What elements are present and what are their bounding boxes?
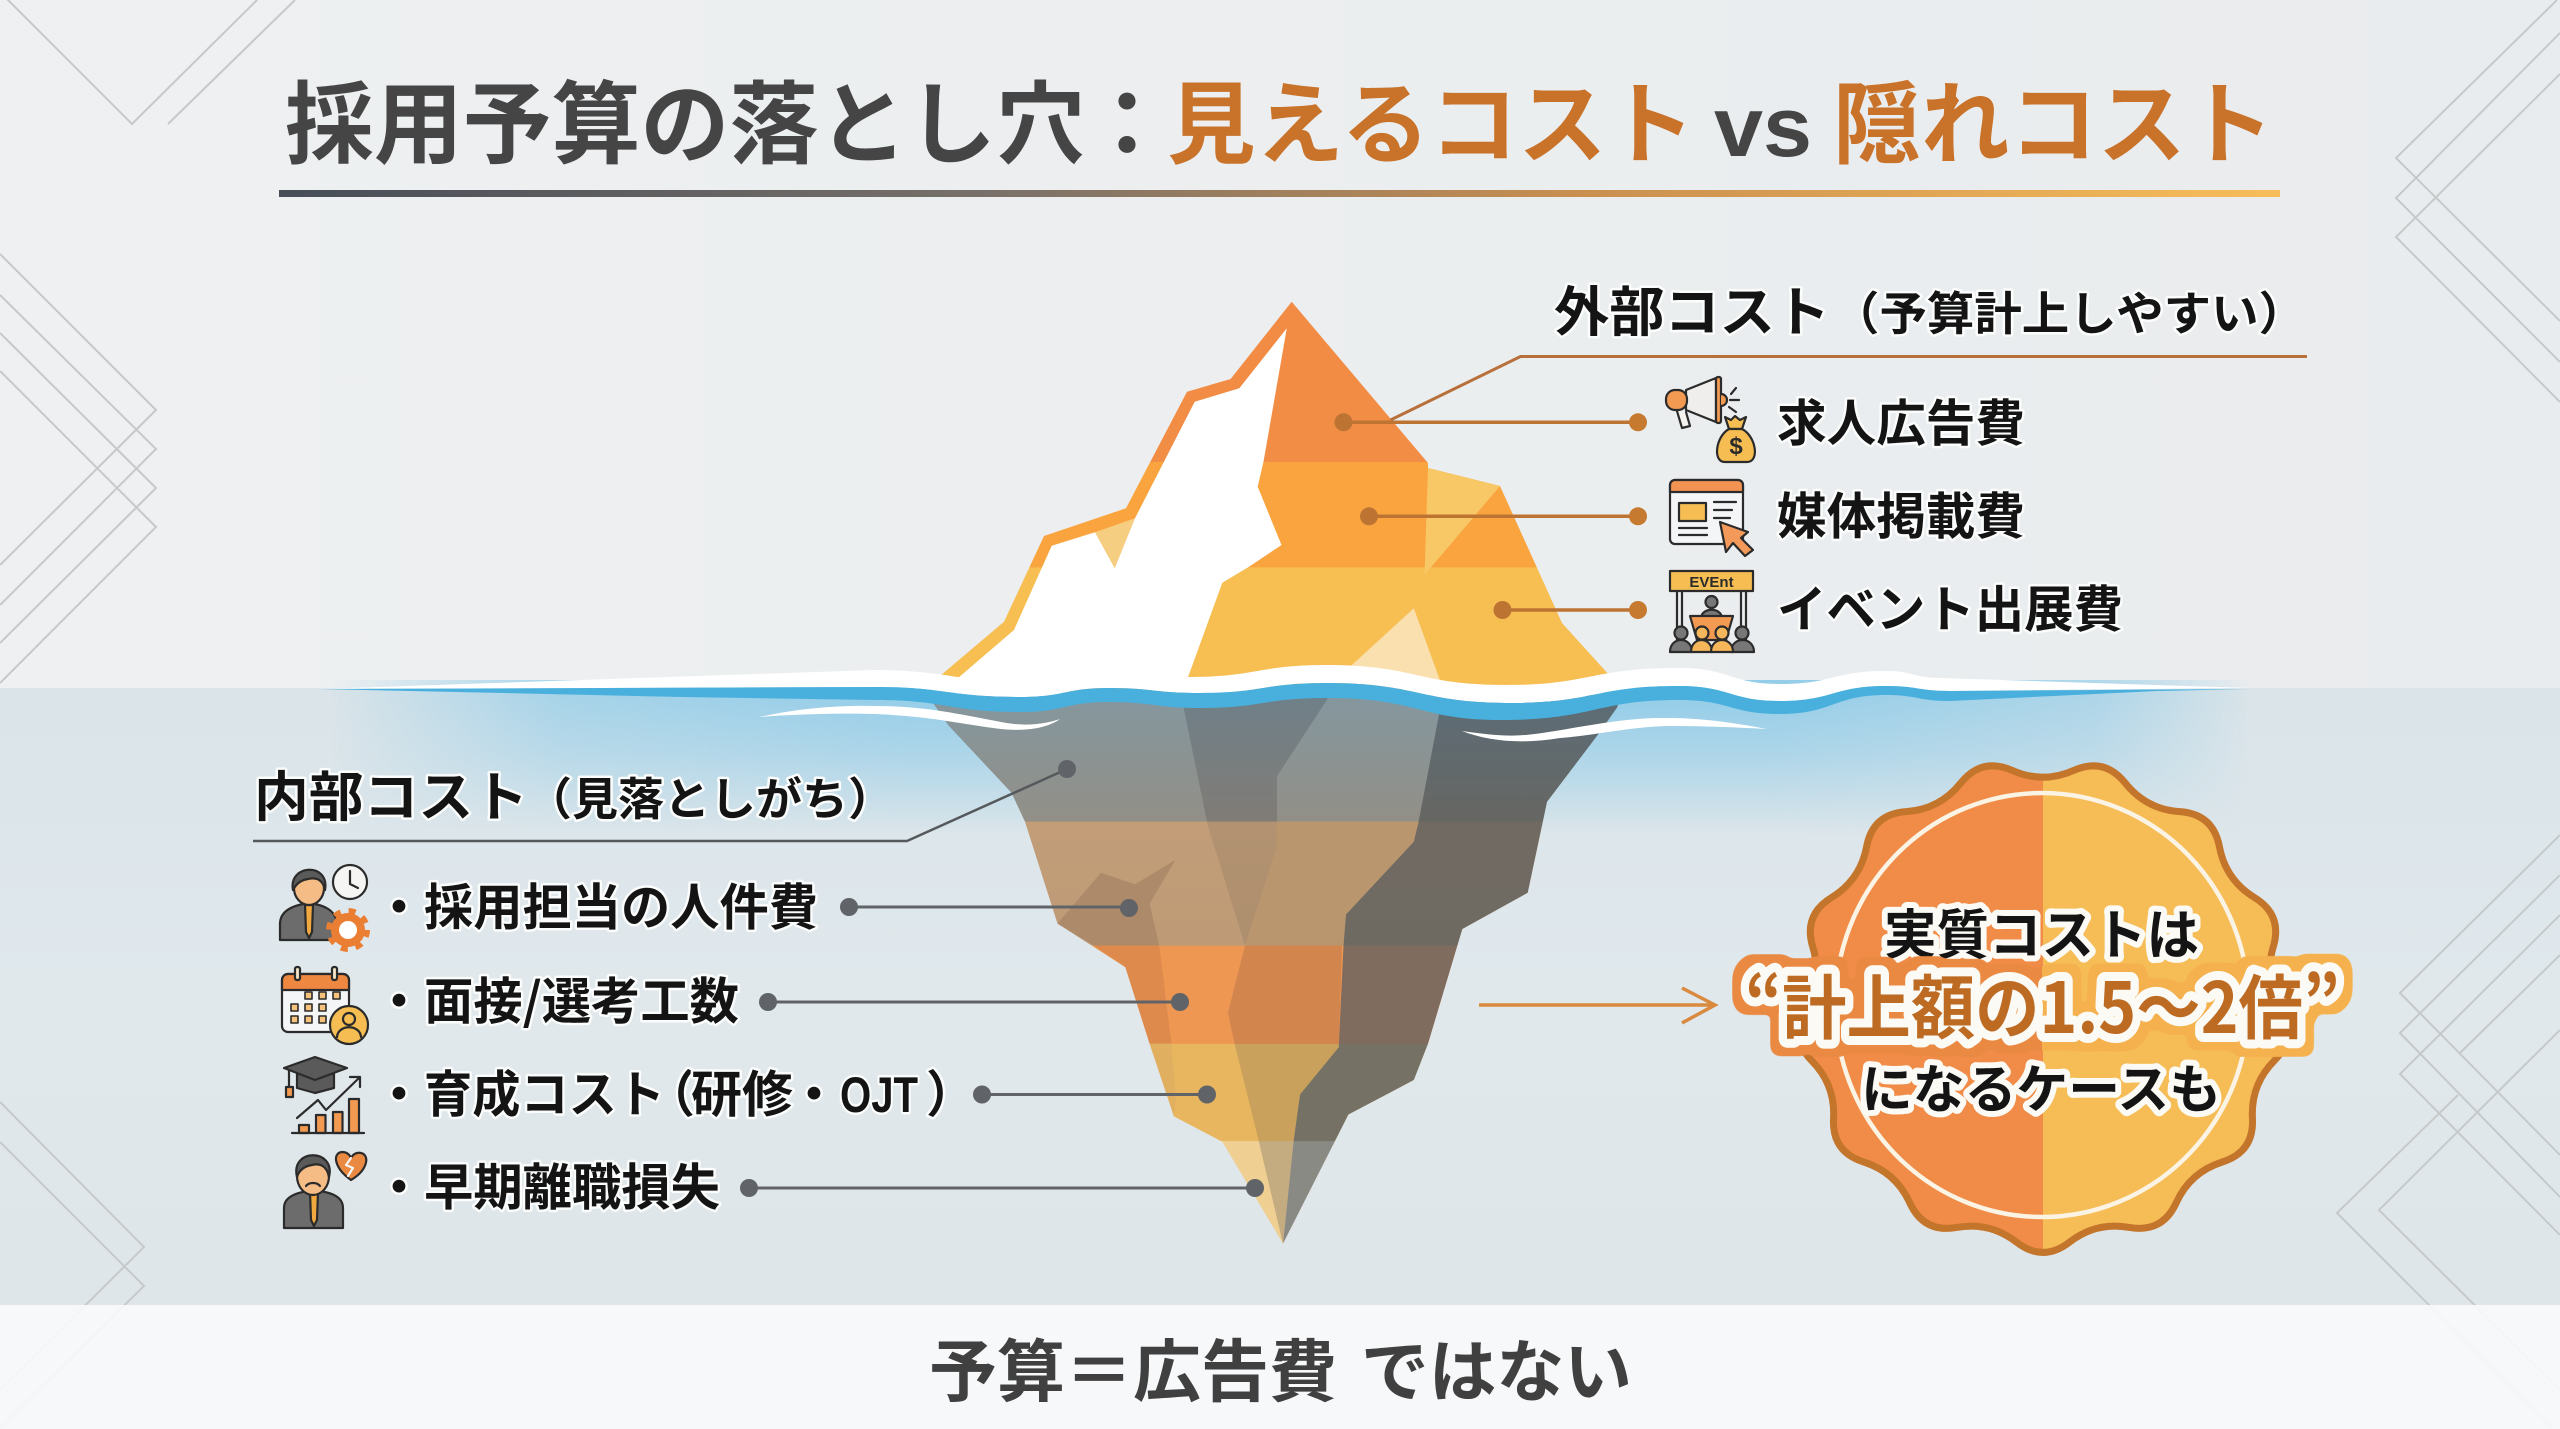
badge [1745,766,2340,1252]
list: external costs: イベント出展費 [1777,570,2123,642]
list: internal costs: ・ [374,1055,424,1127]
icon: recruiter with clock and gear [280,865,367,949]
icon: event booth: EVEnt [1689,574,1734,591]
heading: internal cost: （見落としがち） [526,763,894,828]
list: external costs: 求人広告費 [1777,384,2025,456]
title: 隠れコスト [1833,52,2274,182]
list: internal costs: （ [645,1055,695,1127]
title: 採用予算の落とし穴 [285,52,1085,182]
list: internal costs: 採用担当の人件費 [424,868,818,940]
icon: calendar with candidate [282,967,368,1044]
title: vs [1714,80,1812,174]
list: internal costs: 育成コスト [424,1055,665,1127]
arrow [1479,988,1715,1023]
iceberg: submerged [931,695,1620,1244]
heading: internal cost [254,753,894,832]
foam: right [1462,718,1767,741]
title: ： [1082,52,1172,182]
background: underwater [0,688,2560,1305]
water glow [354,680,2231,822]
footer message: 予算＝広告費 [929,1317,1337,1416]
icon: event booth [1670,571,1754,652]
list: external costs: 媒体掲載費 [1777,477,2025,549]
list: internal costs: 面接/選考工数 [424,962,739,1034]
heading: external cost: （予算計上しやすい） [1832,278,2306,344]
footer message: ではない [1361,1317,1632,1416]
background: sky [0,0,2560,688]
title underline [279,190,2280,197]
list: internal costs: ・ [789,1055,839,1127]
list: external costs [1777,384,2123,642]
badge: “計上額の1.5～2倍” [1745,953,2340,1054]
badge: 実質コストは [1884,891,2199,970]
icon: resigning employee with broken heart [284,1152,366,1228]
title: 見えるコスト [1167,52,1695,182]
foam: left [759,706,1060,730]
list: internal costs: OJT [840,1067,918,1123]
badge: になるケースも [1861,1048,2221,1123]
iceberg: above water [940,302,1610,692]
list: internal costs: 早期離職損失 [424,1148,720,1220]
heading: external cost: 外部コスト [1554,268,1830,347]
icon: web page and cursor [1670,480,1753,556]
leader: internal cost [253,760,1264,1197]
icon: megaphone and money bag [1666,377,1755,462]
list: internal costs: ・ [374,1148,424,1220]
waterline: blue band [319,683,2249,720]
list: internal costs: 研修 [691,1055,793,1127]
icon: megaphone and money bag: $ [1729,433,1743,460]
leader: external cost [1334,356,2307,619]
list: internal costs: ・ [374,962,424,1034]
list: internal costs [374,868,976,1220]
icon: graduation cap and growth chart [284,1057,364,1133]
list: internal costs: ・ [374,868,424,940]
footer message [929,1317,1632,1416]
waterline: white band [319,665,2249,703]
footer band [0,1305,2560,1429]
heading: internal cost: 内部コスト [254,753,528,832]
heading: external cost [1554,268,2306,347]
list: internal costs: ） [926,1055,976,1127]
title [285,52,2274,182]
